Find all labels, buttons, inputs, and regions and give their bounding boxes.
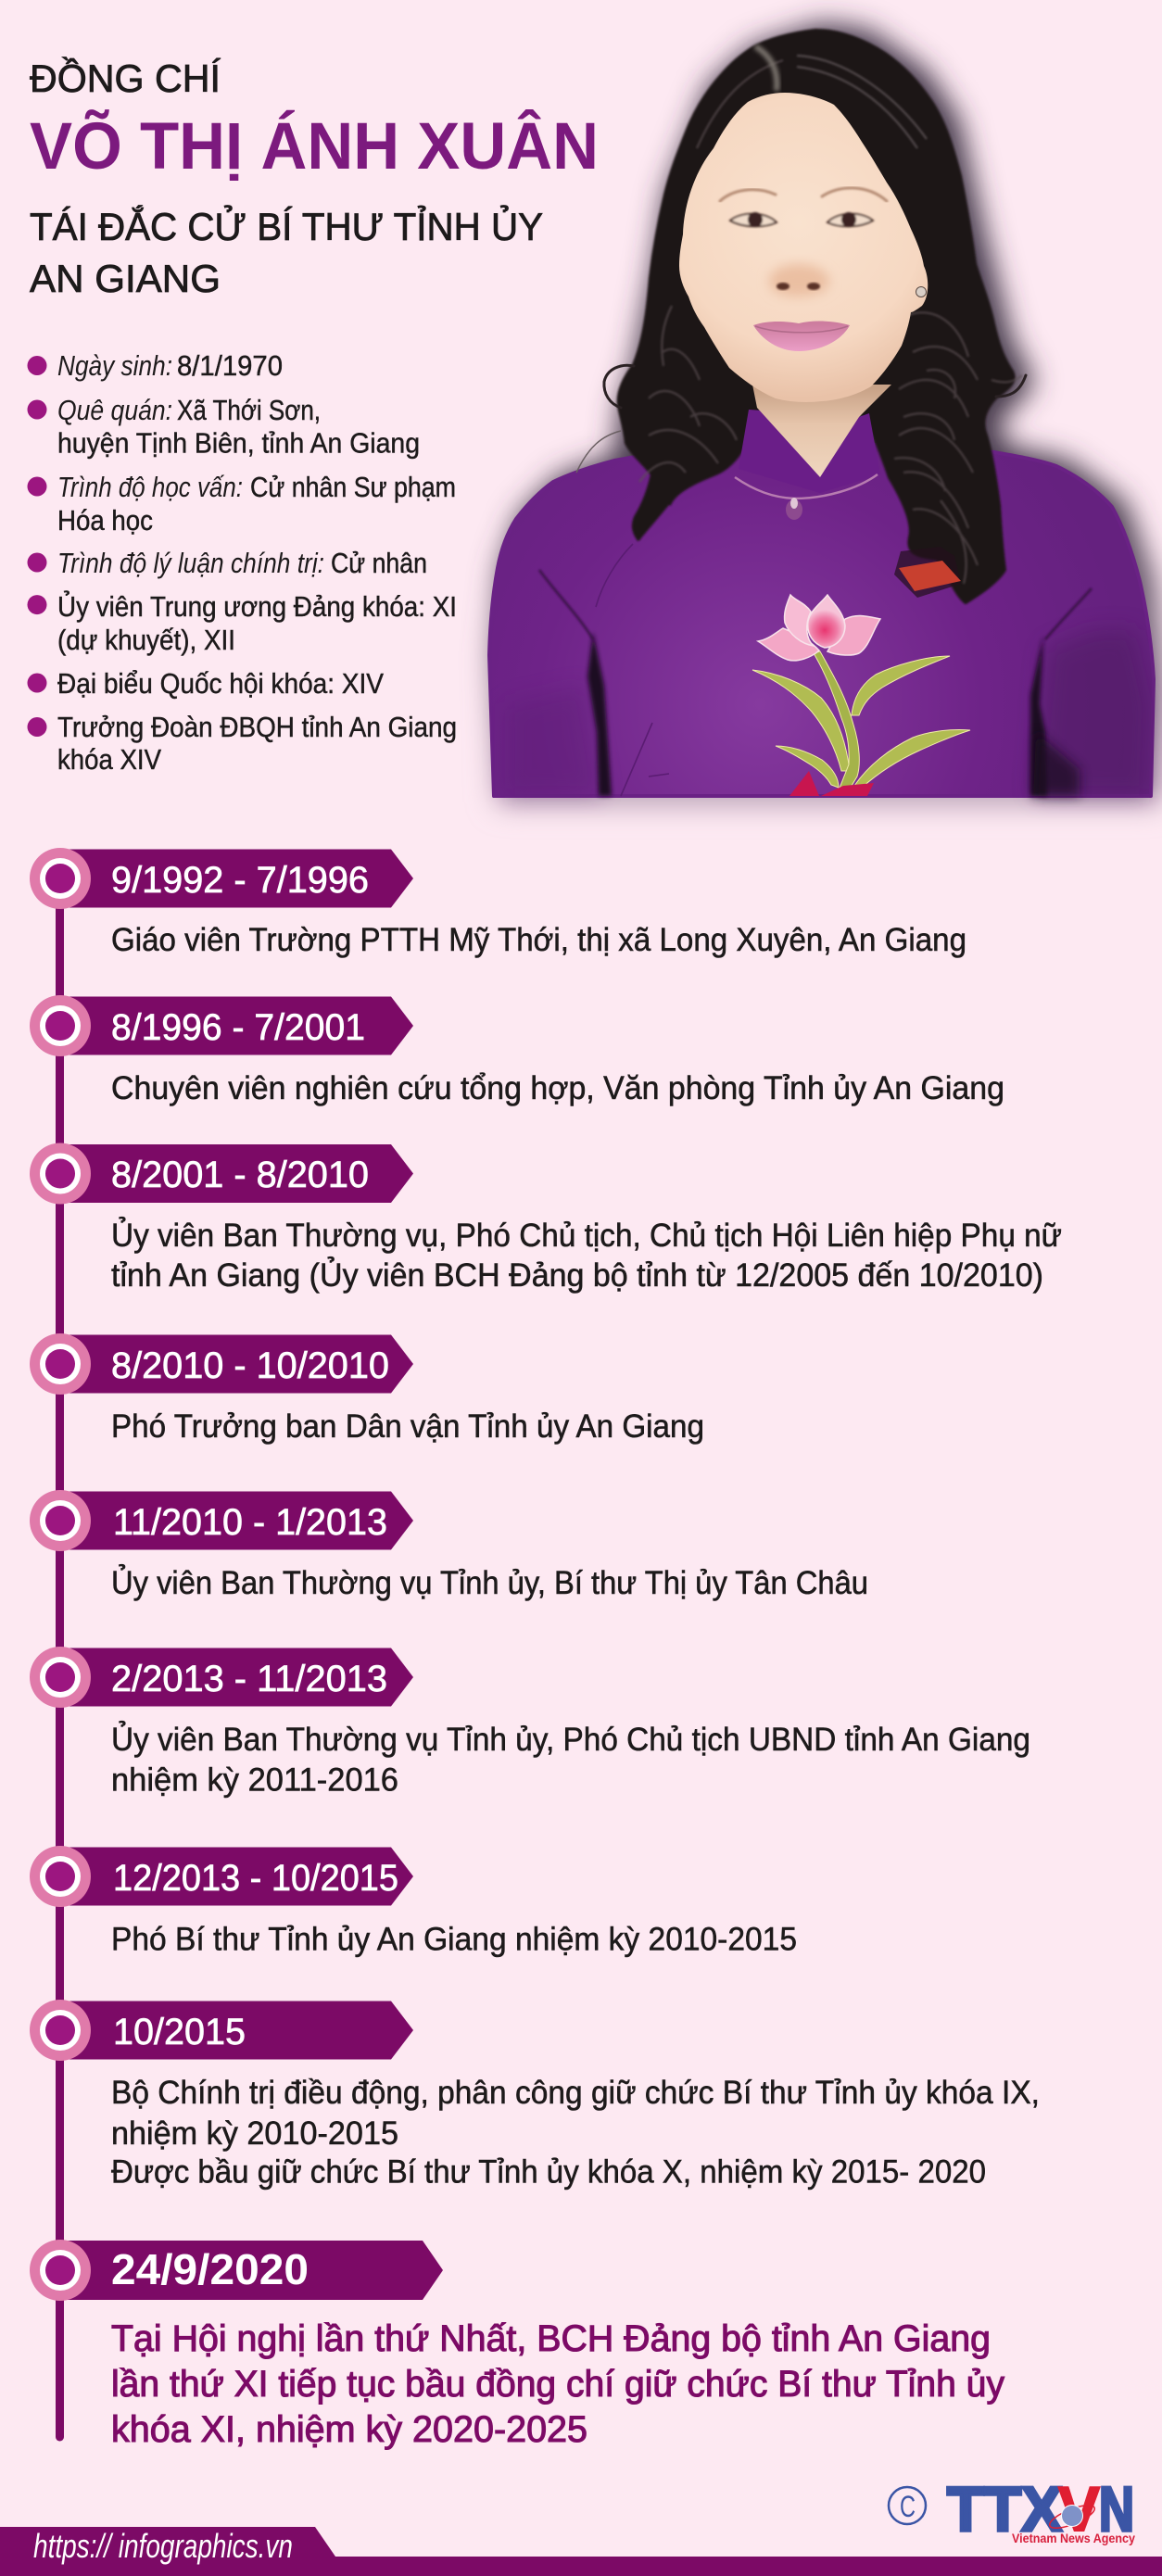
eyebrow right	[822, 188, 887, 201]
timeline vertical line	[56, 878, 64, 2441]
timeline	[30, 848, 1062, 2450]
timeline item 8: 10/2015	[113, 2012, 246, 2052]
timeline item 6: nhiệm kỳ 2011-2016	[111, 1762, 398, 1798]
timeline item 2	[30, 995, 1004, 1106]
timeline item 2: 8/1996 - 7/2001	[111, 1007, 365, 1048]
timeline item 9 highlighted: Tại Hội nghị lần thứ Nhất, BCH Đảng bộ tỉnh An Giang	[111, 2318, 991, 2359]
timeline item 4	[30, 1333, 704, 1445]
dress	[489, 445, 1154, 796]
timeline item 4: Phó Trưởng ban Dân vận Tỉnh ủy An Giang	[111, 1408, 704, 1445]
timeline item 6: 2/2013 - 11/2013	[111, 1659, 387, 1699]
left wisp	[576, 431, 621, 473]
bullet: birth date: 8/1/1970	[177, 350, 283, 382]
timeline item 3: tỉnh An Giang (Ủy viên BCH Đảng bộ tỉnh từ 12/2005 đến 10/2010)	[111, 1256, 1043, 1294]
bullet: home town: Quê quán:	[57, 395, 172, 426]
upper left petal	[785, 595, 814, 646]
timeline item 9 highlighted: khóa XI, nhiệm kỳ 2020-2025	[111, 2409, 587, 2450]
heading: subtitle line 1: TÁI ĐẮC CỬ BÍ THƯ TỈNH ỦY	[30, 204, 543, 248]
nose	[769, 264, 829, 297]
lotus embroidery	[752, 595, 970, 796]
left sleeve shading	[505, 686, 602, 796]
agency letters: N	[1099, 2474, 1134, 2544]
eye right	[827, 212, 873, 227]
bullet: birth date: Ngày sinh:	[57, 350, 172, 382]
bullet: delegation head: khóa XIV	[57, 744, 162, 776]
neck	[752, 385, 891, 477]
lips	[753, 322, 850, 351]
timeline item 3	[30, 1143, 1062, 1294]
timeline item 8: Được bầu giữ chức Bí thư Tỉnh ủy khóa X, nhiệm kỳ 2015- 2020	[111, 2153, 986, 2191]
bullet: delegation head: Trưởng Đoàn ĐBQH tỉnh An Giang	[57, 712, 457, 743]
bullet: political theory: Trình độ lý luận chính trị:	[57, 548, 324, 579]
hair parting	[755, 46, 777, 91]
agency tagline: Vietnam News Agency	[1012, 2531, 1135, 2545]
footer url: https:// infographics.vn	[33, 2527, 293, 2565]
timeline item 8: Bộ Chính trị điều động, phân công giữ chức Bí thư Tỉnh ủy khóa IX,	[111, 2075, 1040, 2111]
bullet: delegation head	[28, 712, 457, 776]
right side dark fold	[1030, 636, 1047, 796]
timeline item 8	[30, 2000, 1040, 2191]
copyright symbol	[889, 2487, 926, 2524]
right petal	[827, 616, 880, 655]
heading: name: VÕ THỊ ÁNH XUÂN	[30, 109, 599, 183]
timeline item 1: Giáo viên Trường PTTH Mỹ Thới, thị xã Long Xuyên, An Giang	[111, 922, 966, 958]
earring	[916, 287, 927, 297]
timeline item 5	[30, 1490, 868, 1601]
biography bullets	[28, 350, 457, 776]
right sleeve shading	[1034, 630, 1152, 796]
bullet: education	[28, 472, 456, 537]
bullet: central committee	[28, 589, 457, 656]
footer bar	[0, 2527, 1162, 2576]
timeline item 7: Phó Bí thư Tỉnh ủy An Giang nhiệm kỳ 2010-2015	[111, 1922, 797, 1957]
bullet: central committee: (dự khuyết), XII	[57, 625, 235, 656]
photo shadow halo	[499, 31, 1159, 799]
heading: đồng chí: ĐỒNG CHÍ	[30, 56, 221, 100]
collar	[739, 410, 880, 493]
timeline item 3: 8/2001 - 8/2010	[111, 1155, 369, 1195]
bullet: education: Trình độ học vấn:	[57, 472, 243, 503]
bullet: political theory: Cử nhân	[331, 548, 427, 579]
bottom flower	[789, 771, 874, 796]
far left petal	[758, 628, 819, 661]
hair strands	[639, 56, 1022, 584]
face	[679, 93, 928, 402]
leaves	[752, 651, 970, 793]
bullet: national assembly: Đại biểu Quốc hội khóa: XIV	[57, 668, 385, 700]
bullet: central committee: Ủy viên Trung ương Đảng khóa: XI	[57, 589, 457, 623]
timeline item 6	[30, 1647, 1030, 1798]
timeline item 6: Ủy viên Ban Thường vụ Tỉnh ủy, Phó Chủ tịch UBND tỉnh An Giang	[111, 1721, 1030, 1758]
timeline item 7: 12/2013 - 10/2015	[113, 1858, 398, 1899]
eye left	[730, 212, 777, 227]
timeline item 9 highlighted: 24/9/2020	[111, 2245, 309, 2293]
left side dark fold	[587, 632, 612, 796]
timeline item 3: Ủy viên Ban Thường vụ, Phó Chủ tịch, Chủ tịch Hội Liên hiệp Phụ nữ	[111, 1217, 1062, 1254]
globe	[1047, 2501, 1097, 2532]
portrait photo	[489, 31, 1159, 799]
centre petal	[808, 595, 845, 648]
timeline item 2: Chuyên viên nghiên cứu tổng hợp, Văn phòng Tỉnh ủy An Giang	[111, 1070, 1004, 1106]
timeline item 4: 8/2010 - 10/2010	[111, 1345, 389, 1386]
eyebrow left	[720, 190, 776, 201]
timeline item 9 highlighted	[30, 2240, 1004, 2450]
timeline item 1: 9/1992 - 7/1996	[111, 860, 369, 901]
timeline item 9 highlighted: lần thứ XI tiếp tục bầu đồng chí giữ chức Bí thư Tỉnh ủy	[111, 2364, 1004, 2405]
left curl	[604, 365, 634, 408]
necklace	[735, 474, 878, 520]
timeline item 5: Ủy viên Ban Thường vụ Tỉnh ủy, Bí thư Thị ủy Tân Châu	[111, 1564, 868, 1601]
bullet: birth date	[28, 350, 283, 382]
heading block	[30, 56, 599, 300]
agency letters	[947, 2474, 1134, 2544]
timeline item 7	[30, 1846, 797, 1957]
bullet: education: Cử nhân Sư phạm	[250, 472, 456, 503]
bullet: home town: huyện Tịnh Biên, tỉnh An Giang	[57, 428, 420, 460]
timeline item 8: nhiệm kỳ 2010-2015	[111, 2115, 398, 2152]
bullet: home town: Xã Thới Sơn,	[177, 395, 321, 426]
hair	[576, 31, 1026, 602]
bullet: education: Hóa học	[57, 505, 153, 537]
right curl	[996, 375, 1026, 397]
copyright symbol: C	[900, 2490, 916, 2523]
agency letters: TTX	[947, 2474, 1062, 2544]
agency letters: V	[1058, 2474, 1100, 2544]
logo: TTXVN	[889, 2474, 1135, 2545]
timeline item 5: 11/2010 - 1/2013	[113, 1502, 387, 1543]
bullet: home town	[28, 395, 420, 460]
heading: subtitle line 2: AN GIANG	[30, 257, 221, 300]
red badge	[894, 547, 961, 598]
timeline item 1	[30, 848, 966, 958]
